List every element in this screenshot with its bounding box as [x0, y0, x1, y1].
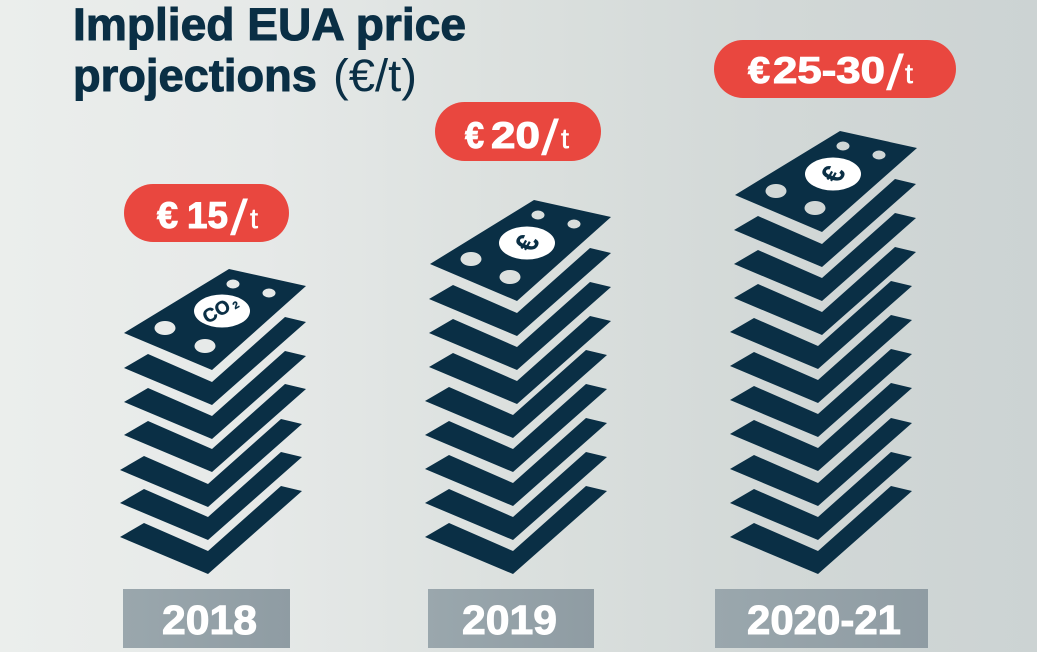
year label: 2020-21: 2020-21 [747, 597, 901, 643]
price pill: 2020-21 [714, 40, 956, 101]
price pill: 2018: 15 [187, 195, 228, 236]
price pill: 2020-21: t [905, 58, 913, 89]
icon: euro banknote [430, 200, 611, 301]
stack of notes: 2018 [120, 269, 306, 574]
price pill: 2019: / [541, 110, 559, 166]
price pill: 2020-21: / [886, 45, 904, 101]
year label: 2018 [123, 589, 290, 648]
price pill: 2018: € [157, 195, 178, 236]
year label: 2020-21 [715, 589, 928, 648]
year label: 2018: 2018 [162, 597, 257, 643]
price pill: 2019: t [561, 123, 569, 154]
title: Implied EUA price [73, 0, 466, 50]
stack of notes: 2019 [425, 200, 611, 574]
icon: euro banknote [735, 131, 917, 232]
icon: euro banknote: € [814, 162, 854, 187]
price pill: 2019: € [465, 115, 484, 156]
title [73, 0, 466, 101]
stack of notes: 2020-21 [730, 131, 917, 574]
price pill: 2019: 20 [491, 115, 540, 156]
price pill: 2018: / [230, 190, 248, 246]
icon: CO2 banknote: CO [199, 296, 234, 328]
year label: 2019 [428, 589, 594, 648]
year label: 2019: 2019 [462, 597, 557, 643]
title: projections [73, 50, 317, 101]
price pill: 2019 [435, 102, 601, 166]
price pill: 2020-21: € [748, 50, 770, 91]
icon: euro banknote: € [508, 231, 548, 256]
price pill: 2018 [124, 184, 289, 246]
price pill: 2018: t [250, 203, 258, 234]
price pill: 2020-21: 25-30 [773, 50, 885, 91]
title: (€/t) [333, 50, 417, 101]
icon: CO2 banknote: 2 [231, 299, 242, 312]
icon: CO2 banknote [124, 269, 306, 370]
